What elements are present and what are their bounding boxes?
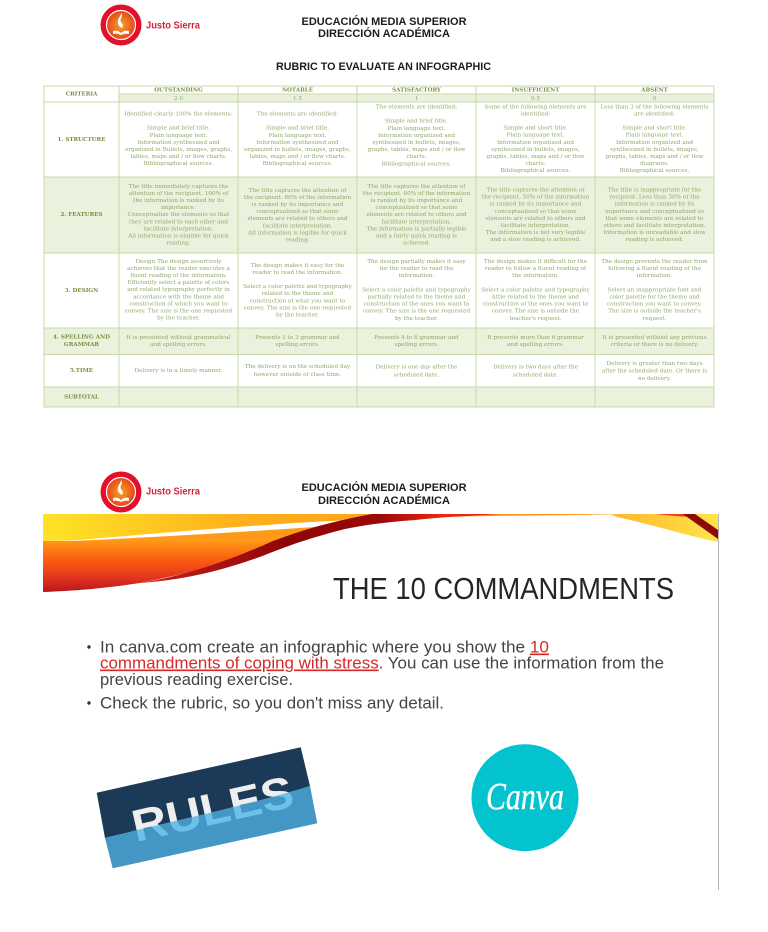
- row 2: features descriptors: they are related to each other and: [129, 219, 228, 225]
- row 2: features descriptors: attention of the recipient. 100% of: [129, 191, 229, 197]
- header: institution: DIRECCIÓN ACADÉMICA: [318, 27, 450, 40]
- column headers: 1: [415, 96, 418, 102]
- row 2: features descriptors: elements are related to others and: [366, 212, 467, 218]
- row 1: structure descriptors: The elements are identified:: [376, 104, 457, 110]
- rubric table: [44, 86, 714, 407]
- row 3: design descriptors: The design makes it difficult for the: [484, 259, 588, 265]
- row 1: structure descriptors: Simple and short title.: [503, 126, 568, 132]
- row 2: features descriptors: and a slow reading is achieved.: [490, 237, 581, 243]
- row 3: design descriptors: construction of what you want to: [250, 298, 346, 304]
- column headers: INSUFFICIENT: [512, 88, 560, 94]
- row 3: design descriptors: fluent reading of the information.: [130, 273, 227, 279]
- row 1: structure descriptors: charts.: [526, 161, 546, 167]
- row 2: features descriptors: reading.: [285, 238, 310, 244]
- row 2: features descriptors: the information is ranked by its: [133, 198, 224, 204]
- RULES image: RULES: [127, 766, 298, 852]
- row 3: design descriptors: Select a color palette and typography: [481, 287, 591, 293]
- row 1: structure descriptors: graphs, tables, maps and / or flow: [486, 154, 585, 160]
- row 4: spelling descriptors: It presents more than 6 grammar: [487, 335, 584, 341]
- row 2: features descriptors: is ranked by its importance and: [252, 202, 344, 208]
- RULES image: [97, 747, 317, 868]
- column headers: 2.0: [174, 96, 183, 102]
- row 3: design descriptors: construction you want to convey.: [607, 302, 702, 308]
- row 3: design descriptors: convey. The size is outside the: [492, 309, 580, 315]
- header: institution: EDUCACIÓN MEDIA SUPERIOR: [302, 15, 467, 28]
- row 1: structure descriptors: Information organized and: [378, 133, 455, 139]
- row 2: features descriptors: facilitate interpretation.: [501, 223, 570, 229]
- row 3: design descriptors: reader to read the information.: [252, 270, 343, 276]
- row 3: design descriptors: information.: [399, 273, 434, 279]
- row 4: spelling descriptors: It is presented without grammatical: [127, 335, 231, 341]
- header: institution, page 2: [302, 481, 467, 507]
- row 2: features descriptors: The title immediately captures the: [129, 184, 229, 190]
- row 5: time descriptors: no delivery.: [638, 376, 671, 382]
- bullet list: previous reading exercise.: [100, 671, 293, 689]
- row 1: structure descriptors: synthesized in bullets, images,: [610, 147, 699, 153]
- row 2: features descriptors: achieved.: [403, 241, 430, 247]
- row 3: design descriptors: the information.: [512, 273, 559, 279]
- row 1: structure descriptors: charts.: [407, 154, 427, 160]
- header: institution: [302, 15, 467, 40]
- row 1: structure descriptors: Identified clearly 100% the elements:: [124, 112, 233, 118]
- row 1: structure descriptors: Plain language text.: [150, 133, 208, 139]
- row 1: structure descriptors: Information synthesized and: [137, 140, 220, 146]
- row 3: design descriptors: and related typography perfectly in: [127, 287, 230, 293]
- logo: Justo Sierra, page 1: [100, 4, 200, 46]
- row 3: design descriptors: information.: [637, 273, 672, 279]
- row 2: features descriptors: is ranked by its importance and: [371, 198, 463, 204]
- row 2: features descriptors: and a fairly quick reading is: [376, 234, 457, 240]
- row 1: structure descriptors: organized in bullets, images, graphs,: [244, 147, 351, 153]
- row 1: structure descriptors: diagrams.: [640, 161, 669, 167]
- column headers: ABSENT: [640, 88, 669, 94]
- Canva logo: Canva: [486, 776, 564, 818]
- row 1: structure descriptors: [124, 104, 709, 174]
- row 3: design descriptors: convey. The size is the one requested: [125, 308, 233, 314]
- row 3: design descriptors: by the teacher.: [395, 316, 438, 322]
- row 3: design descriptors: Design The design assertively: [135, 259, 222, 265]
- column headers: 1.5: [293, 96, 302, 102]
- row 1: structure descriptors: graphs, tables, maps and / or flow: [367, 147, 466, 153]
- row 2: features descriptors: The information is not very legible: [486, 230, 586, 236]
- row 2: features descriptors: conceptualized so that some: [257, 209, 339, 215]
- row 2: features descriptors: Conceptualize the elements so that: [128, 212, 230, 218]
- row 3: design descriptors: [125, 259, 708, 322]
- row 1: structure descriptors: Plain language text.: [507, 133, 565, 139]
- row 5: time descriptors: Delivery is in a timely manner.: [134, 368, 223, 374]
- row 1: structure descriptors: Bibliographical sources.: [501, 168, 571, 174]
- row 3: design descriptors: Select a color palette and typography: [362, 287, 472, 293]
- row 1: structure descriptors: tables, maps and / or flow charts.: [249, 154, 346, 160]
- column headers: CRITERIA: [66, 92, 98, 98]
- row 1: structure descriptors: Bibliographical sources.: [263, 161, 333, 167]
- column headers: OUTSTANDING: [154, 88, 203, 94]
- row 3: design descriptors: Efficiently select a palette of colors: [128, 280, 230, 286]
- row 3: design descriptors: color palette for the theme and: [609, 294, 700, 300]
- row 1: structure descriptors: The elements are identified:: [257, 112, 338, 118]
- row 3: design descriptors: following a fluent reading of the: [608, 266, 702, 272]
- row 3: design descriptors: The design prevents the reader from: [601, 259, 708, 265]
- row 5: time descriptors: [134, 361, 707, 382]
- row 2: features descriptors: the recipient. 60% of the information: [363, 191, 470, 197]
- row labels: 4. SPELLING AND: [53, 334, 110, 340]
- row 2: features descriptors: information is ranked by its: [615, 202, 694, 208]
- row 2: features descriptors: recipient. Less than 50% of the: [609, 195, 700, 201]
- row 2: features descriptors: the recipient. 80% of the information: [244, 195, 351, 201]
- row 2: features descriptors: [127, 184, 706, 247]
- row 1: structure descriptors: Bibliographical sources.: [144, 161, 214, 167]
- row 4: spelling descriptors: criteria or there is no delivery.: [611, 342, 699, 348]
- row 3: design descriptors: convey. The size is the one requested: [244, 305, 352, 311]
- row 1: structure descriptors: synthesized in bullets, images,: [372, 140, 461, 146]
- row 2: features descriptors: elements are related to others and: [247, 216, 348, 222]
- row 1: structure descriptors: Simple and short title.: [622, 126, 687, 132]
- row 2: features descriptors: the recipient. 50% of the information: [482, 195, 589, 201]
- column headers: 0.5: [531, 96, 540, 102]
- slide title: THE 10 COMMANDMENTS: [333, 571, 674, 606]
- row 5: time descriptors: however outside of class time.: [254, 372, 341, 378]
- row 1: structure descriptors: Bibliographical sources.: [620, 168, 690, 174]
- row 3: design descriptors: construction of the ones you want to: [483, 302, 589, 308]
- row 5: time descriptors: Delivery is greater than two days: [606, 361, 703, 367]
- row 3: design descriptors: construction of which you want to: [129, 301, 228, 307]
- row 3: design descriptors: request.: [643, 316, 667, 322]
- bullet list: commandments of coping with stress . You can use the information from the: [100, 654, 664, 672]
- row 4: spelling descriptors: spelling errors.: [394, 342, 439, 348]
- row 1: structure descriptors: Bibliographical sources.: [382, 161, 452, 167]
- row 2: features descriptors: The title captures the attention of: [368, 184, 466, 190]
- column headers: SATISFACTORY: [392, 88, 442, 94]
- row 2: features descriptors: facilitate interpretation.: [144, 226, 213, 232]
- row 1: structure descriptors: are identified:: [634, 111, 675, 117]
- row 1: structure descriptors: identified:: [521, 111, 550, 117]
- row 2: features descriptors: conceptualized so that some: [376, 205, 458, 211]
- row labels: 1. STRUCTURE: [58, 137, 105, 143]
- row 2: features descriptors: All information is legible for quick: [247, 230, 347, 236]
- row 1: structure descriptors: Information organized and: [497, 140, 574, 146]
- row 2: features descriptors: facilitate interpretation.: [263, 223, 332, 229]
- row 3: design descriptors: Select an inappropriate font and: [608, 287, 702, 293]
- row 2: features descriptors: conceptualized so that some: [495, 209, 577, 215]
- row 5: time descriptors: Delivery is two days after the: [493, 364, 579, 370]
- row labels: GRAMMAR: [64, 342, 99, 348]
- row 2: features descriptors: reading is achieved.: [625, 237, 684, 243]
- row 1: structure descriptors: organized in Bullets, images, graphs,: [125, 147, 232, 153]
- row labels: [53, 137, 110, 400]
- row 4: spelling descriptors: Presents 4 to 6 grammar and: [374, 335, 459, 341]
- row 1: structure descriptors: Information organized and: [616, 140, 693, 146]
- header: institution, page 2: DIRECCIÓN ACADÉMICA: [318, 494, 450, 507]
- row 2: features descriptors: The title captures the attention of: [249, 188, 347, 194]
- logo: Justo Sierra, page 2: Justo Sierra: [146, 486, 200, 498]
- column headers: 0: [653, 96, 657, 102]
- row 5: time descriptors: scheduled date.: [513, 372, 558, 378]
- row 1: structure descriptors: Some of the following elements are: [484, 104, 587, 110]
- row 1: structure descriptors: graphs, tables, maps and / or flow: [605, 154, 704, 160]
- row labels: 5.TIME: [70, 368, 93, 374]
- row 2: features descriptors: importance.: [161, 205, 196, 211]
- row 1: structure descriptors: Simple and brief title.: [147, 126, 210, 132]
- row 3: design descriptors: The design makes it easy for the: [251, 263, 345, 269]
- row 2: features descriptors: that some elements are related to: [606, 216, 704, 222]
- row 4: spelling descriptors: and spelling errors.: [150, 342, 207, 348]
- row 3: design descriptors: teacher's request.: [509, 316, 562, 322]
- row 4: spelling descriptors: Presents 1 to 3 grammar and: [255, 335, 340, 341]
- slide right edge: [718, 514, 720, 890]
- row 1: structure descriptors: Less than 3 of the following elements: [600, 104, 709, 110]
- row 5: time descriptors: after the scheduled date. Or there is: [602, 369, 707, 375]
- row 1: structure descriptors: Plain language text.: [269, 133, 327, 139]
- row 1: structure descriptors: Information synthesized and: [256, 140, 339, 146]
- row 3: design descriptors: related to the theme and: [262, 291, 334, 297]
- row 2: features descriptors: All information is eligible for quick: [127, 234, 229, 240]
- row 1: structure descriptors: synthesized in bullets, images,: [491, 147, 580, 153]
- row labels: 2. FEATURES: [60, 212, 103, 218]
- column headers: [66, 88, 669, 102]
- row 2: features descriptors: The information is partially legible: [366, 226, 467, 232]
- row labels: SUBTOTAL: [64, 394, 99, 400]
- row 3: design descriptors: convey. The size is the one requested: [363, 309, 471, 315]
- row 3: design descriptors: Select a color palette and typography: [243, 284, 353, 290]
- row 4: spelling descriptors: spelling errors.: [275, 342, 320, 348]
- title: rubric: RUBRIC TO EVALUATE AN INFOGRAPHIC: [276, 61, 491, 73]
- row 5: time descriptors: The delivery is on the scheduled day: [245, 364, 351, 370]
- row 3: design descriptors: by the teacher.: [276, 312, 319, 318]
- row 1: structure descriptors: Simple and brief title.: [385, 119, 448, 125]
- row 2: features descriptors: is ranked by its importance and: [490, 202, 582, 208]
- row 4: spelling descriptors: [127, 335, 707, 348]
- row 1: structure descriptors: Simple and brief title.: [266, 126, 329, 132]
- row 1: structure descriptors: tables, maps and / or flow charts.: [130, 154, 227, 160]
- row 4: spelling descriptors: It is presented without any previous: [602, 335, 707, 341]
- logo: Justo Sierra, page 2: [100, 472, 200, 512]
- slide flame banner: [43, 514, 718, 592]
- row 2: features descriptors: The title is inappropriate for the: [608, 188, 702, 194]
- row labels: 3. DESIGN: [65, 288, 98, 294]
- row 2: features descriptors: others and facilitate interpretation.: [603, 223, 706, 229]
- row 3: design descriptors: for the reader to read the: [380, 266, 454, 272]
- RULES image: RULES: [127, 766, 298, 852]
- row 1: structure descriptors: Plain language text.: [388, 126, 446, 132]
- row 1: structure descriptors: Plain language text.: [626, 133, 684, 139]
- row 3: design descriptors: The design partially makes it easy: [367, 259, 467, 265]
- row 3: design descriptors: reader to follow a fluent reading of: [485, 266, 587, 272]
- row 3: design descriptors: The size is outside the teacher's: [608, 309, 701, 315]
- row 3: design descriptors: little related to the theme and: [492, 294, 579, 300]
- bullet list: In canva.com create an infographic where you show the 10: [100, 638, 549, 656]
- bullet list: [87, 638, 664, 712]
- logo: Justo Sierra, page 1: Justo Sierra: [146, 20, 200, 32]
- row 5: time descriptors: scheduled date.: [394, 372, 439, 378]
- row 2: features descriptors: importance and conceptualized so: [605, 209, 704, 215]
- row 2: features descriptors: The title captures the attention of: [487, 188, 585, 194]
- column headers: NOTABLE: [282, 88, 313, 94]
- row 3: design descriptors: construction of the ones you want to: [364, 302, 470, 308]
- row 4: spelling descriptors: and spelling errors.: [507, 342, 564, 348]
- row 3: design descriptors: achieves that the reader executes a: [127, 266, 231, 272]
- row 3: design descriptors: partially related to the theme and: [368, 294, 466, 300]
- row 2: features descriptors: Information is unreadable and slow: [603, 230, 706, 236]
- Canva logo: [472, 744, 578, 851]
- row 2: features descriptors: reading.: [166, 241, 191, 247]
- bullet list: Check the rubric, so you don't miss any detail.: [100, 694, 444, 712]
- row 5: time descriptors: Delivery is one day after the: [376, 364, 458, 370]
- row 2: features descriptors: elements are related to others and: [485, 216, 586, 222]
- row 3: design descriptors: accordance with the theme and: [133, 294, 224, 300]
- header: institution, page 2: EDUCACIÓN MEDIA SUPERIOR: [302, 481, 467, 494]
- row 2: features descriptors: facilitate interpretation.: [382, 219, 451, 225]
- row 3: design descriptors: by the teacher.: [157, 316, 200, 322]
